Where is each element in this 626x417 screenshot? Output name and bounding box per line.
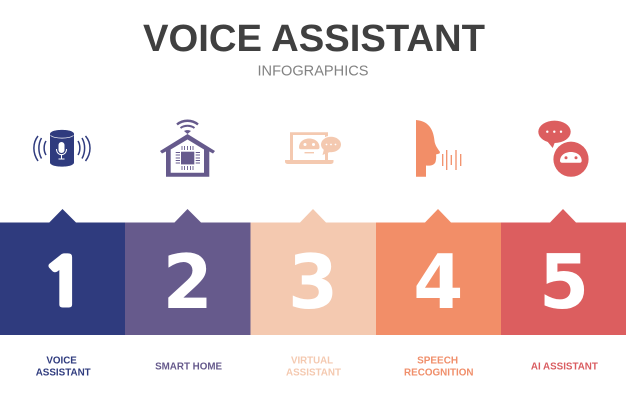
panel: step 3 bbox=[250, 209, 376, 335]
icon: AI assistant chat bbox=[538, 121, 589, 177]
title: VOICE ASSISTANT bbox=[143, 18, 485, 60]
label: virtual assistant: ASSISTANT bbox=[286, 366, 342, 378]
panel: step 3: 3 bbox=[288, 240, 338, 326]
panel: step 1: 1 bbox=[41, 250, 87, 316]
label: virtual assistant bbox=[286, 355, 342, 378]
label: AI assistant: AI ASSISTANT bbox=[531, 361, 598, 373]
label: speech recognition: RECOGNITION bbox=[404, 366, 474, 378]
icon: smart home bbox=[160, 121, 215, 177]
label: speech recognition bbox=[404, 355, 474, 378]
subtitle: INFOGRAPHICS bbox=[258, 64, 368, 80]
panel: step 5: 5 bbox=[539, 240, 589, 326]
label: voice assistant: ASSISTANT bbox=[36, 366, 91, 378]
panel: step 4: 4 bbox=[413, 240, 463, 326]
label: voice assistant: VOICE bbox=[46, 355, 77, 367]
panel: step 4 bbox=[376, 209, 502, 335]
icon: smart speaker bbox=[34, 130, 90, 167]
panel: step 2 bbox=[125, 209, 250, 335]
label: voice assistant bbox=[36, 355, 91, 378]
icon: virtual assistant laptop bbox=[285, 132, 342, 164]
label: virtual assistant: VIRTUAL bbox=[291, 355, 334, 367]
label: speech recognition: SPEECH bbox=[417, 355, 458, 367]
icon: speaking head bbox=[416, 120, 461, 177]
panel: step 1 bbox=[0, 209, 126, 335]
panel: step 2: 2 bbox=[163, 240, 213, 326]
label: smart home: SMART HOME bbox=[155, 361, 222, 373]
panel: step 5 bbox=[501, 209, 626, 335]
